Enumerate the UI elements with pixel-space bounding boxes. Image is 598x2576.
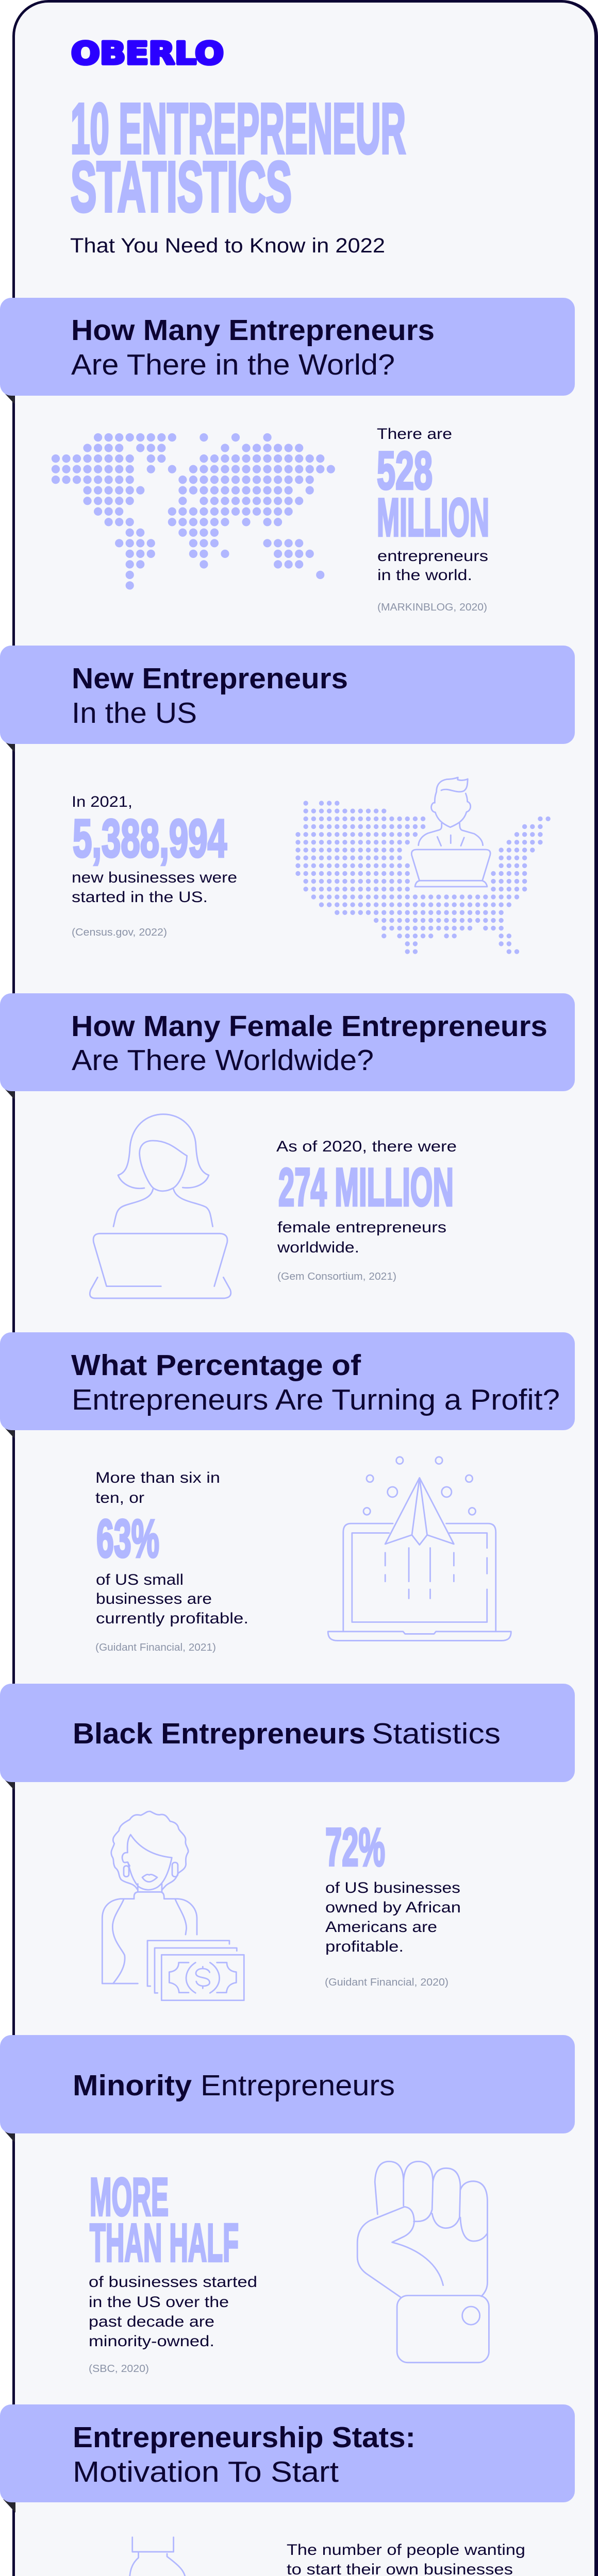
stat text: (SBC, 2020) xyxy=(89,2363,149,2375)
panel: minority entrepreneurs xyxy=(0,2035,575,2375)
title: STATISTICS xyxy=(71,147,292,227)
stat text: 274 MILLION xyxy=(278,1158,454,1217)
panel: profit percentage xyxy=(0,1332,575,1653)
icon: woman with banknotes xyxy=(102,1811,244,2001)
banner xyxy=(0,993,575,1099)
stat text: businesses are xyxy=(96,1590,212,1607)
stat text: worldwide. xyxy=(277,1239,359,1256)
banner: In the US xyxy=(72,697,197,730)
stat text: past decade are xyxy=(89,2313,214,2330)
banner: Entrepreneurs xyxy=(201,2069,395,2102)
stat text: entrepreneurs xyxy=(377,548,488,565)
stat text: More than six in xyxy=(95,1469,220,1486)
banner xyxy=(0,1684,575,1790)
icon: man at laptop xyxy=(411,777,490,887)
banner: Entrepreneurs Are Turning a Profit? xyxy=(72,1383,560,1416)
stat text: (Census.gov, 2022) xyxy=(72,927,167,938)
stat text: ten, or xyxy=(95,1489,144,1506)
stat text: MILLION xyxy=(377,488,489,548)
icon: raised fist xyxy=(357,2161,489,2363)
icon: hand holding briefcase xyxy=(92,2537,224,2576)
stat text: (Guidant Financial, 2020) xyxy=(325,1977,448,1988)
stat text: 528 xyxy=(377,441,433,501)
stat text xyxy=(72,793,237,938)
banner: How Many Entrepreneurs xyxy=(71,314,435,347)
stat text: MORE xyxy=(90,2167,169,2227)
header xyxy=(70,36,406,257)
dotted world map xyxy=(56,437,331,585)
banner: Motivation To Start xyxy=(73,2455,339,2488)
banner: Entrepreneurship Stats: xyxy=(73,2421,416,2454)
stat text xyxy=(286,2541,532,2576)
stat text: THAN HALF xyxy=(90,2213,239,2273)
banner: New Entrepreneurs xyxy=(72,662,348,695)
panel: female entrepreneurs xyxy=(0,993,575,1298)
banner: Minority xyxy=(73,2069,192,2102)
stat text: in the US over the xyxy=(89,2294,229,2311)
banner xyxy=(0,646,575,752)
stat text xyxy=(377,426,489,613)
banner xyxy=(0,2035,575,2142)
panel: black entrepreneurs xyxy=(0,1684,575,2001)
stat text: In 2021, xyxy=(72,793,132,810)
banner xyxy=(0,298,575,404)
banner: Black Entrepreneurs xyxy=(73,1717,366,1750)
stat text: There are xyxy=(377,426,452,443)
stat text: of businesses started xyxy=(89,2274,257,2291)
stat text: (Gem Consortium, 2021) xyxy=(277,1271,396,1282)
stat text: started in the US. xyxy=(72,889,208,906)
stat text: of US businesses xyxy=(325,1879,460,1896)
banner: How Many Female Entrepreneurs xyxy=(71,1010,547,1043)
stat text: 63% xyxy=(96,1509,159,1569)
stat text: new businesses were xyxy=(72,869,237,886)
banner: Are There Worldwide? xyxy=(72,1044,374,1077)
subtitle: That You Need to Know in 2022 xyxy=(70,234,385,257)
stat text: Americans are xyxy=(325,1919,437,1936)
stat text: of US small xyxy=(96,1571,184,1588)
stat text: 5,388,994 xyxy=(73,809,227,869)
banner: Statistics xyxy=(372,1717,501,1750)
stat text: owned by African xyxy=(325,1899,461,1916)
stat text: currently profitable. xyxy=(96,1610,248,1627)
dotted US map xyxy=(298,803,548,952)
title xyxy=(71,89,406,227)
stat text xyxy=(95,1469,248,1653)
icon: paper plane leaving laptop xyxy=(328,1457,511,1640)
panel: motivation to start xyxy=(0,2404,575,2576)
stat text: (MARKINBLOG, 2020) xyxy=(377,602,487,613)
banner: What Percentage of xyxy=(71,1349,361,1382)
panel: new entrepreneurs xyxy=(0,646,575,952)
stat text xyxy=(89,2167,257,2375)
icon: woman at laptop xyxy=(90,1114,231,1298)
stat text: profitable. xyxy=(325,1938,404,1955)
stat text: female entrepreneurs xyxy=(277,1219,446,1236)
stat text xyxy=(325,1818,461,1988)
logo: Oberlo: OBERLO xyxy=(71,36,224,72)
banner xyxy=(0,1332,575,1438)
banner: Are There in the World? xyxy=(71,348,395,381)
stat text: 72% xyxy=(325,1818,385,1877)
banner xyxy=(0,2404,575,2513)
stat text: minority-owned. xyxy=(89,2333,214,2350)
stat text: in the world. xyxy=(377,567,472,584)
panel: how many entrepreneurs xyxy=(0,298,575,613)
stat text: As of 2020, there were xyxy=(276,1138,457,1155)
stat text: The number of people wanting xyxy=(287,2541,525,2558)
stat text xyxy=(276,1138,457,1282)
stat text: (Guidant Financial, 2021) xyxy=(95,1642,216,1653)
